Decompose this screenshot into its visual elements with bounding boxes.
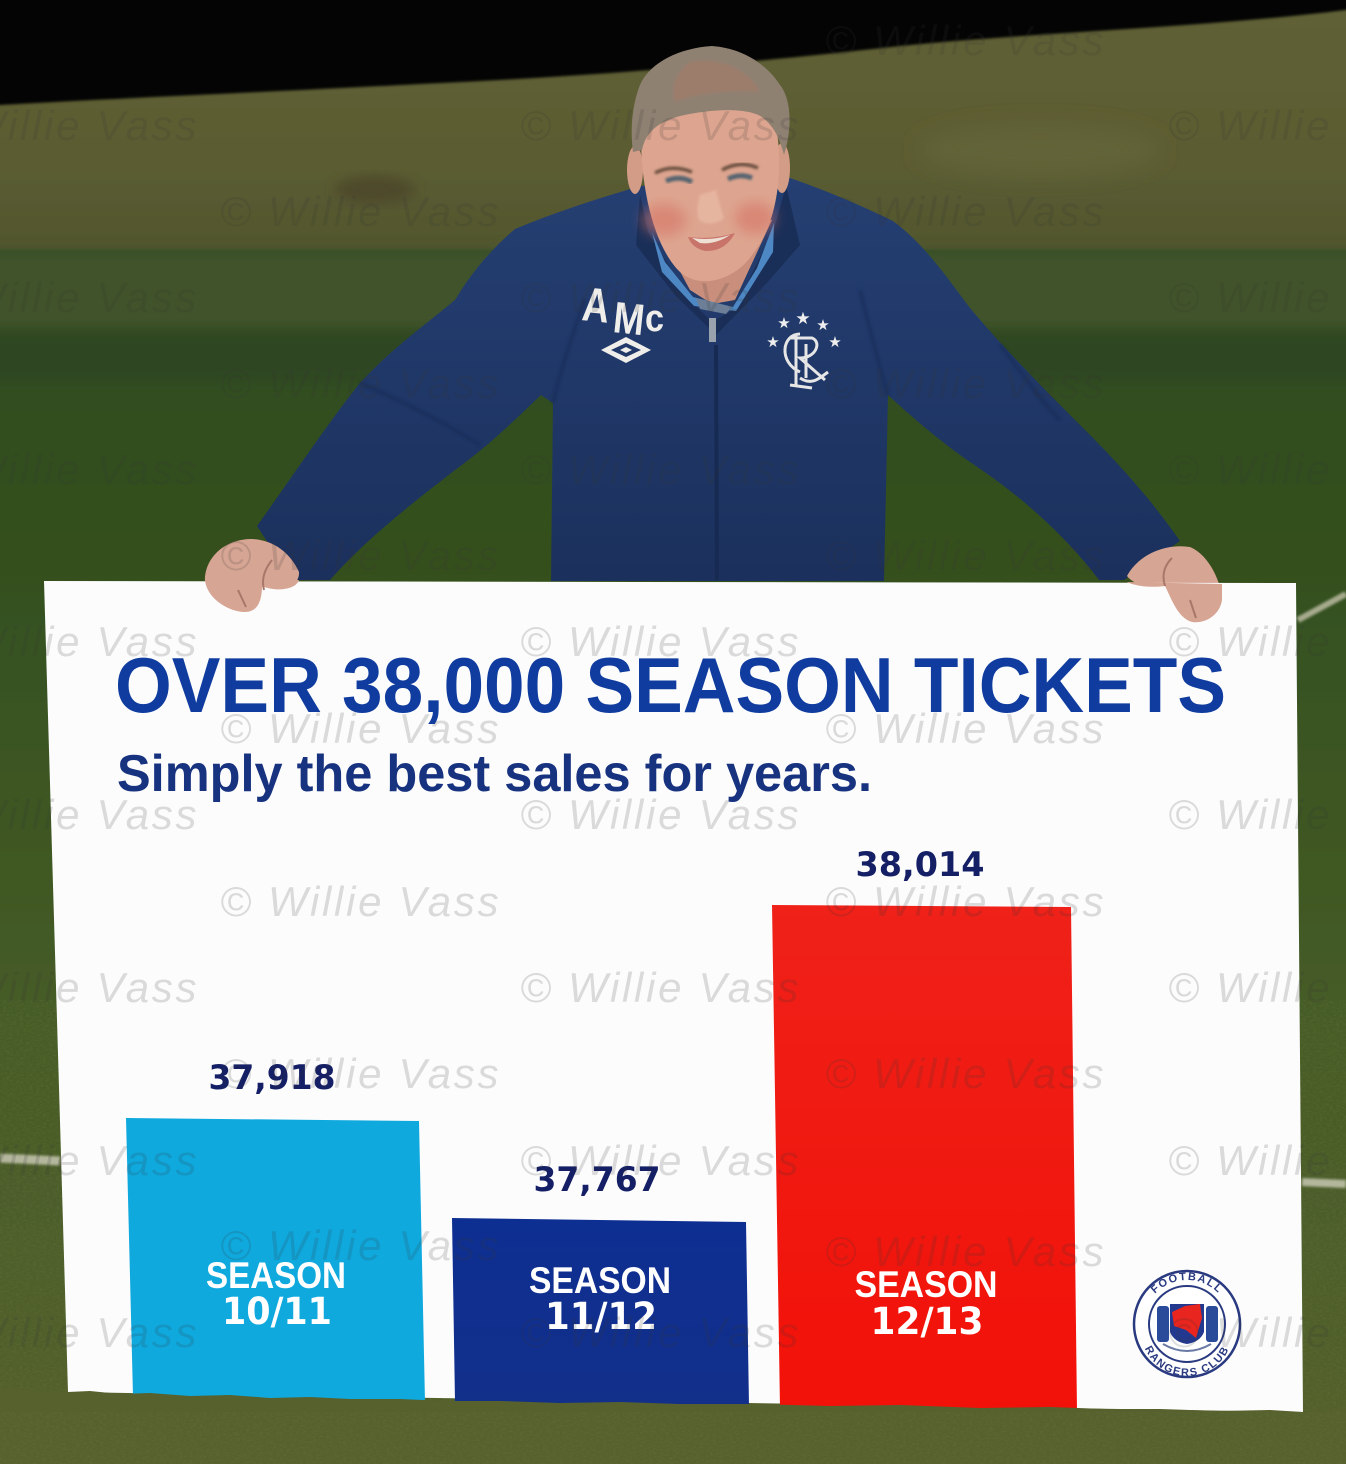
watermarks: © Willie Vass <box>520 274 801 321</box>
watermarks: © Willie Vass <box>825 17 1106 64</box>
ears <box>627 143 790 194</box>
watermarks: © Willie Vass <box>220 878 501 925</box>
board <box>44 581 1303 1412</box>
watermarks: © Willie Vass <box>825 878 1106 925</box>
dark inner collar <box>636 185 800 335</box>
bar: season 12/13: 38,014 <box>856 845 984 885</box>
club crest: ★ <box>777 314 791 332</box>
watermarks: © Willie Vass <box>220 360 501 407</box>
watermarks: © Willie Vass <box>825 532 1106 579</box>
person: Ally McCoist <box>205 46 1222 622</box>
title: OVER 38,000 SEASON TICKETS <box>115 641 1226 729</box>
zip <box>709 318 717 580</box>
bar: season 10/11: 37,918 <box>208 1058 336 1098</box>
bar: season 12/13: SEASON <box>854 1264 998 1305</box>
bar: season 12/13: 12/13 <box>870 1300 984 1343</box>
bar: season 11/12: 37,767 <box>534 1160 660 1200</box>
watermarks: © Willie Vass <box>825 188 1106 235</box>
watermarks: © Willie Vass <box>220 532 501 579</box>
watermarks: © Willie Vass <box>220 188 501 235</box>
right hand <box>1127 546 1222 622</box>
sleeve shading <box>360 290 1060 445</box>
eyes and brows <box>655 164 758 182</box>
umbro logo <box>601 337 651 363</box>
watermarks: © Willie Vass <box>520 791 801 838</box>
watermarks: © Willie Vass <box>520 1309 801 1356</box>
cheeks <box>642 202 775 236</box>
bar: season 10/11: SEASON <box>206 1255 346 1296</box>
subtitle: Simply the best sales for years. <box>117 745 872 803</box>
watermarks: © Willie Vass <box>520 1137 801 1184</box>
jacket initials: A <box>580 278 612 334</box>
collar <box>652 223 774 311</box>
left hand <box>205 539 299 612</box>
watermarks: © Willie Vass <box>520 446 801 493</box>
club badge: FOOTBALL <box>1150 1272 1220 1294</box>
hair highlight <box>673 61 760 102</box>
bar: season 10/11 <box>126 1058 425 1402</box>
watermarks: © Willie Vass <box>520 618 801 665</box>
club badge: RANGERS CLUB <box>1145 1345 1228 1376</box>
bar: season 10/11: 10/11 <box>222 1290 332 1333</box>
bar: season 11/12 <box>452 1160 749 1406</box>
watermarks: © Willie Vass <box>220 1050 501 1097</box>
watermarks: © Willie Vass <box>220 705 501 752</box>
watermarks: © Willie Vass <box>825 1228 1106 1275</box>
watermarks: © Willie Vass <box>220 1222 501 1269</box>
grass texture <box>0 1412 1346 1464</box>
club crest: ★ <box>816 316 830 334</box>
watermarks: © Willie Vass <box>520 102 801 149</box>
mouth <box>688 233 735 251</box>
bar: season 11/12: SEASON <box>529 1260 671 1301</box>
bar: season 11/12: 11/12 <box>545 1295 657 1338</box>
shirt under the neck <box>696 298 732 314</box>
jacket initials: c <box>645 298 664 340</box>
jacket <box>257 178 1180 581</box>
club badge <box>1132 1270 1242 1378</box>
bar: season 12/13 <box>772 845 1077 1412</box>
hair <box>632 46 790 155</box>
foreground grass along the foot of the board <box>0 1388 1346 1464</box>
neck <box>655 220 772 304</box>
watermarks: © Willie Vass <box>520 964 801 1011</box>
watermarks: © Willie Vass <box>825 1050 1106 1097</box>
watermarks: © Willie Vass <box>825 705 1106 752</box>
face <box>641 101 779 281</box>
club crest <box>766 309 842 388</box>
fingers gripping the board <box>205 558 1222 622</box>
nose <box>697 190 724 223</box>
club crest: ★ <box>795 309 811 329</box>
watermarks: © Willie Vass <box>825 360 1106 407</box>
jacket initials <box>580 278 664 345</box>
bar chart <box>126 845 1077 1412</box>
club crest: ★ <box>766 333 780 351</box>
club crest: ★ <box>828 333 842 351</box>
jacket initials: M <box>611 293 647 345</box>
pitch line markings <box>0 594 1346 1184</box>
